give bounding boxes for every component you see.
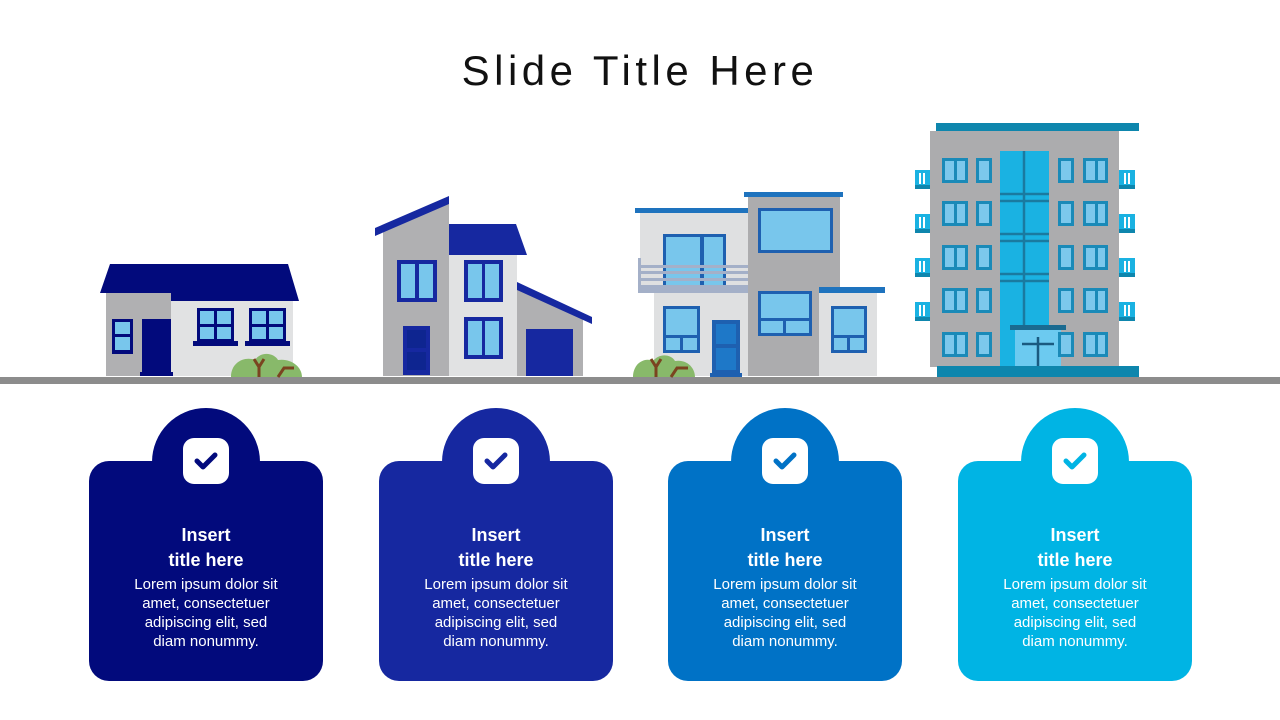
- card 1: Insert: [181, 525, 231, 545]
- card 4: Insert: [1050, 525, 1100, 545]
- card 3: adipiscing elit, sed: [724, 614, 846, 631]
- card 2: title here: [458, 550, 534, 570]
- balconies: [915, 170, 1135, 321]
- illustration: buildings: [0, 123, 1280, 384]
- icon: check 3: [762, 438, 808, 484]
- card 1: diam nonummy.: [153, 633, 259, 650]
- icon: check 2: [473, 438, 519, 484]
- icon: check 1: [183, 438, 229, 484]
- card 2: Insert: [471, 525, 521, 545]
- card 3: Lorem ipsum dolor sit: [713, 576, 857, 593]
- icon: check 4: [1052, 438, 1098, 484]
- card 1: amet, consectetuer: [142, 595, 270, 612]
- card 2: adipiscing elit, sed: [435, 614, 557, 631]
- ground line: [0, 377, 1280, 384]
- card 1: adipiscing elit, sed: [145, 614, 267, 631]
- card 1: [89, 408, 323, 681]
- card 3: amet, consectetuer: [721, 595, 849, 612]
- card 4: Lorem ipsum dolor sit: [1003, 576, 1147, 593]
- house 1: [100, 264, 302, 377]
- tower: [915, 123, 1139, 377]
- card 2: [379, 408, 613, 681]
- card 4: [958, 408, 1192, 681]
- card 3: title here: [747, 550, 823, 570]
- card 2: diam nonummy.: [443, 633, 549, 650]
- card 4: amet, consectetuer: [1011, 595, 1139, 612]
- card 3: [668, 408, 902, 681]
- house 2: [375, 196, 592, 376]
- card 4: title here: [1037, 550, 1113, 570]
- card 3: diam nonummy.: [732, 633, 838, 650]
- card 2: Lorem ipsum dolor sit: [424, 576, 568, 593]
- card 3: Insert: [760, 525, 810, 545]
- card 4: adipiscing elit, sed: [1014, 614, 1136, 631]
- card 1: Lorem ipsum dolor sit: [134, 576, 278, 593]
- title: Slide Title Here: [462, 47, 818, 94]
- card 2: amet, consectetuer: [432, 595, 560, 612]
- card 1: title here: [168, 550, 244, 570]
- house 3: [633, 192, 885, 377]
- card 4: diam nonummy.: [1022, 633, 1128, 650]
